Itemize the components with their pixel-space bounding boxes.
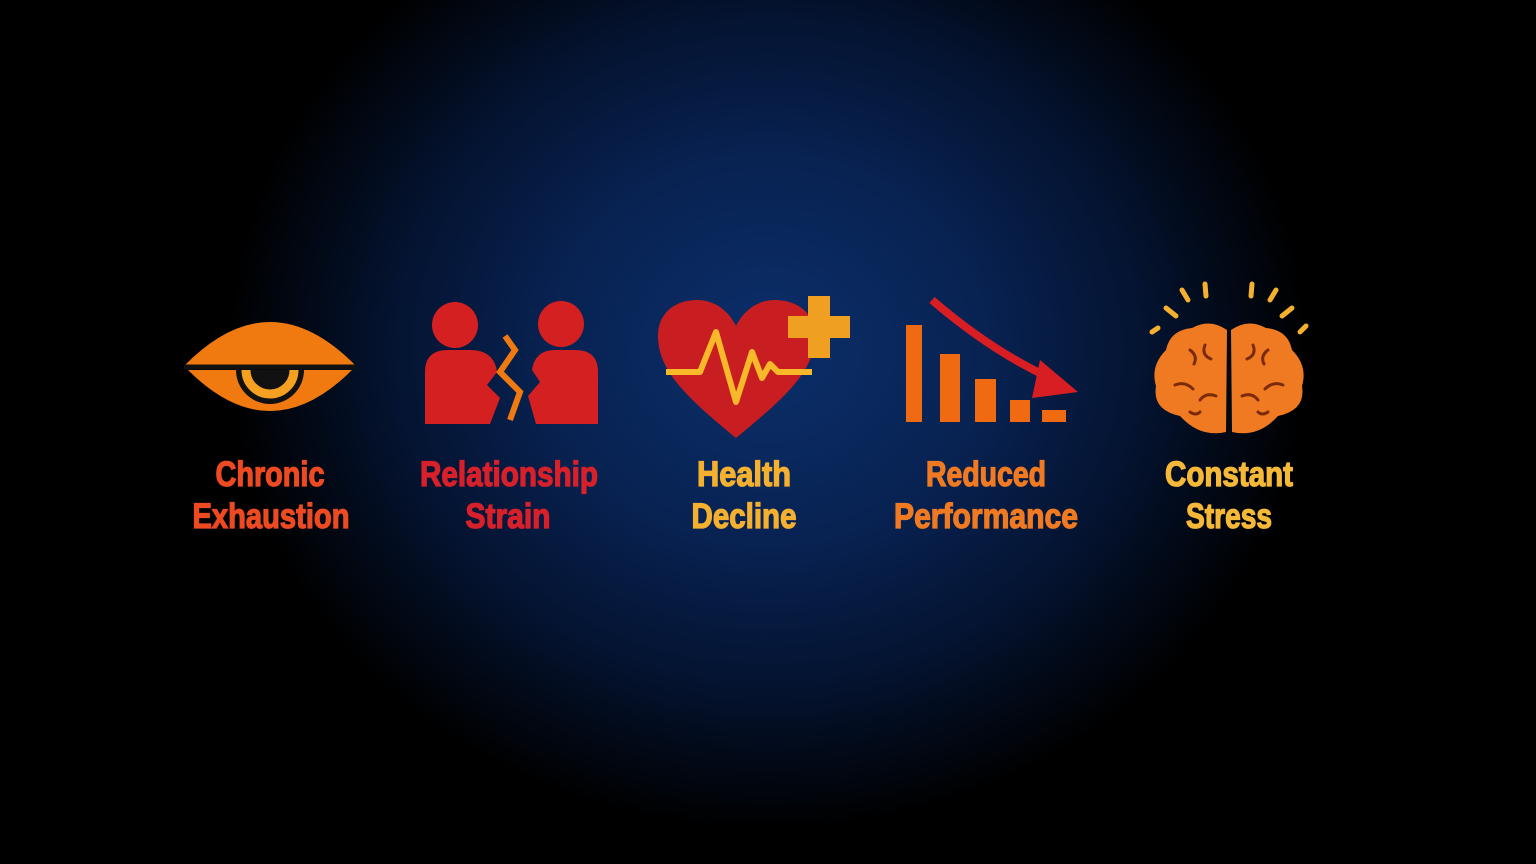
label: Chronic Exhaustion: Exhaustion (192, 497, 350, 536)
label: Relationship Strain (420, 455, 598, 536)
item: chronic exhaustion (184, 322, 356, 536)
label: Relationship Strain: Strain (466, 497, 550, 536)
icon: tired eye (184, 322, 356, 411)
label: Constant Stress: Stress (1186, 497, 1272, 536)
label: Constant Stress (1165, 455, 1293, 536)
label: Reduced Performance: Performance (894, 497, 1078, 536)
item: constant stress (1152, 284, 1306, 536)
label: Reduced Performance (894, 455, 1078, 536)
icon: separated people (425, 301, 598, 424)
icon: heart with ECG and plus (658, 296, 850, 438)
label: Health Decline (692, 455, 796, 536)
label: Health Decline: Decline (692, 497, 796, 536)
icon: brain with stress rays (1152, 284, 1306, 433)
item: health decline (658, 296, 850, 536)
label: Chronic Exhaustion: Chronic (216, 455, 324, 494)
label: Reduced Performance: Reduced (926, 455, 1046, 494)
item: reduced performance (894, 300, 1078, 536)
item: relationship strain (420, 301, 598, 536)
label: Chronic Exhaustion (192, 455, 350, 536)
label: Relationship Strain: Relationship (420, 455, 598, 494)
label: Health Decline: Health (697, 455, 791, 494)
label: Constant Stress: Constant (1165, 455, 1293, 494)
icon: declining bars with arrow (906, 300, 1078, 422)
